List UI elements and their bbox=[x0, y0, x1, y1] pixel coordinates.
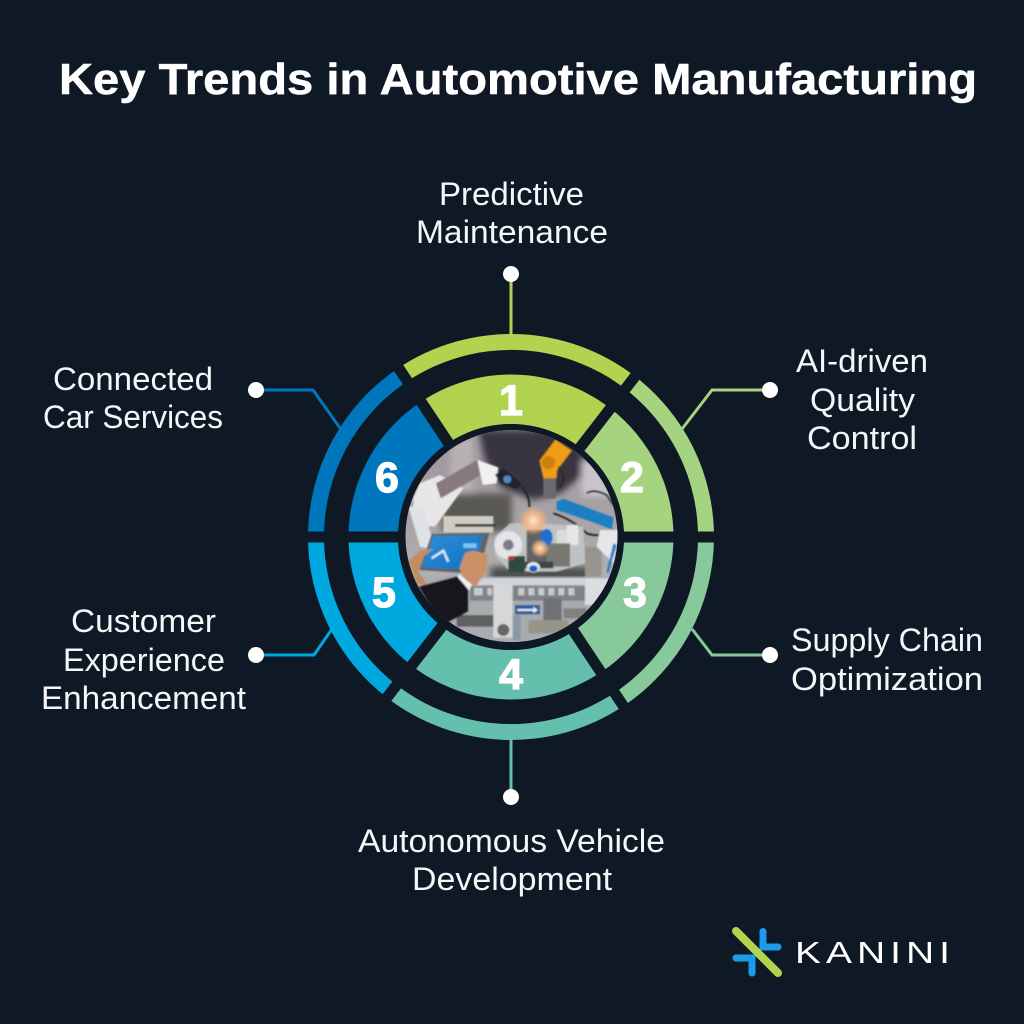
number 5: 5 bbox=[372, 569, 396, 617]
inner segment 4 bbox=[412, 626, 601, 699]
inner segment 2 bbox=[580, 408, 674, 537]
blue robot arm bbox=[557, 499, 613, 529]
machine base bbox=[443, 516, 493, 533]
outer ring segment 1 bbox=[399, 334, 635, 389]
wordmark: KANINI bbox=[795, 935, 955, 970]
number 1: 1 bbox=[499, 377, 523, 425]
label: predictive maintenance bbox=[416, 176, 608, 250]
label: autonomous vehicle development: Development bbox=[412, 861, 612, 897]
outer ring segment 4 bbox=[387, 685, 623, 740]
center photo: robots and tablet in factory bbox=[406, 430, 618, 642]
connector: customer experience enhancement bbox=[248, 629, 332, 663]
inner segment 3 bbox=[574, 537, 674, 672]
number 3: 3 bbox=[623, 569, 647, 617]
outer ring segment 3 bbox=[614, 537, 714, 706]
label: AI-driven quality control: Quality bbox=[810, 382, 915, 418]
inner segment 5 bbox=[348, 537, 442, 666]
inner segment 6 bbox=[348, 402, 448, 537]
outer ring segment 5 bbox=[308, 537, 397, 698]
label: customer experience enhancement: Experience bbox=[63, 642, 225, 678]
inner segment 1 bbox=[421, 375, 610, 448]
label: supply chain optimization: Optimization bbox=[791, 661, 983, 697]
label: AI-driven quality control: Control bbox=[807, 420, 917, 456]
label: autonomous vehicle development bbox=[358, 823, 665, 897]
outer ring segment 2 bbox=[625, 376, 714, 537]
label: autonomous vehicle development: Autonomous Vehicle bbox=[358, 823, 665, 859]
label: connected car services: Car Services bbox=[43, 399, 223, 435]
label: supply chain optimization: Supply Chain bbox=[791, 622, 983, 658]
connector: supply chain optimization bbox=[692, 629, 778, 663]
connector: connected car services bbox=[248, 382, 340, 428]
label: connected car services bbox=[43, 361, 223, 435]
left robot arm bbox=[413, 475, 463, 527]
label: AI-driven quality control bbox=[796, 343, 928, 456]
label: connected car services: Connected bbox=[53, 361, 213, 397]
number 4: 4 bbox=[499, 651, 523, 699]
title: Key Trends in Automotive Manufacturing bbox=[59, 55, 977, 104]
label: customer experience enhancement bbox=[41, 603, 246, 716]
logo: Kanini bbox=[736, 931, 955, 973]
number 2: 2 bbox=[620, 454, 644, 502]
tablet and hands bbox=[419, 533, 489, 574]
orange robot arm bbox=[539, 439, 572, 478]
label: customer experience enhancement: Customer bbox=[71, 603, 216, 639]
connector: predictive maintenance bbox=[503, 266, 519, 337]
connector: AI-driven quality control bbox=[682, 382, 778, 429]
outer ring segment 6 bbox=[308, 368, 408, 537]
label: predictive maintenance: Predictive bbox=[439, 176, 584, 212]
label: supply chain optimization bbox=[791, 622, 983, 697]
engine assembly bbox=[495, 523, 585, 572]
icon: logo mark bbox=[736, 931, 778, 973]
label: predictive maintenance: Maintenance bbox=[416, 214, 608, 250]
number 6: 6 bbox=[375, 454, 399, 502]
connector: autonomous vehicle development bbox=[503, 737, 519, 805]
label: customer experience enhancement: Enhancement bbox=[41, 680, 246, 716]
label: AI-driven quality control: AI-driven bbox=[796, 343, 928, 379]
